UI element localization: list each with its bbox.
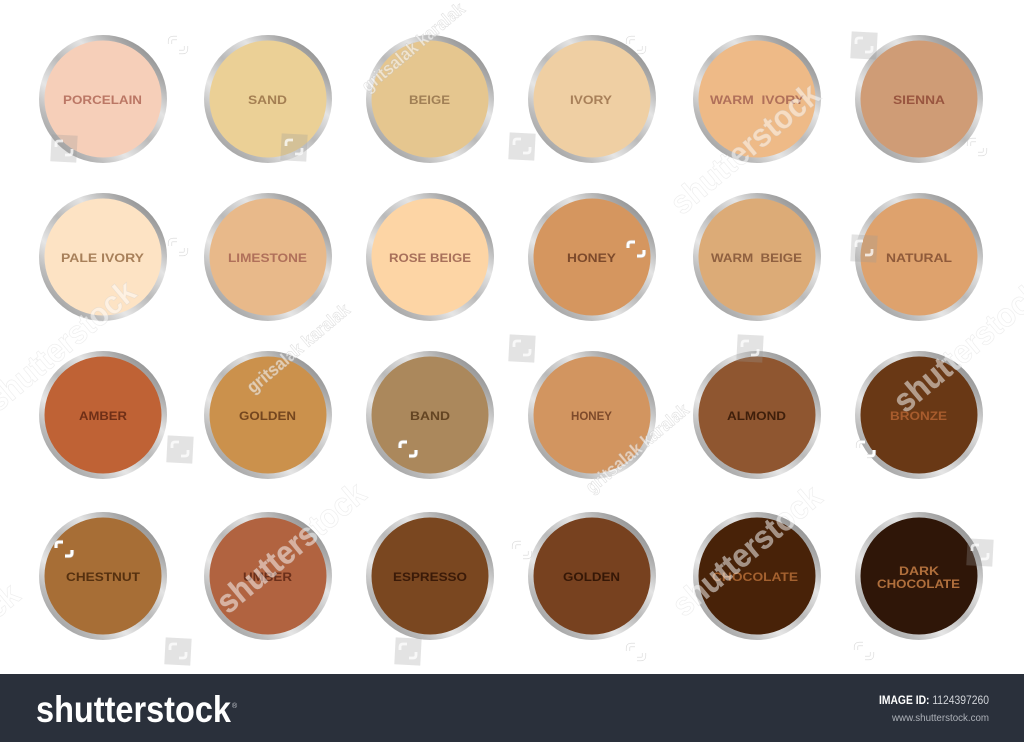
swatch: Porcelain: PORCELAIN bbox=[63, 95, 142, 107]
swatch: Ivory bbox=[528, 35, 656, 163]
swatch: Almond bbox=[693, 351, 821, 479]
swatch: Honey: HONEY bbox=[567, 253, 616, 265]
swatch: Porcelain bbox=[39, 35, 167, 163]
swatch: Limestone bbox=[204, 193, 332, 321]
swatch: Dark Chocolate: CHOCOLATE bbox=[877, 579, 960, 591]
swatch: Amber: AMBER bbox=[79, 411, 128, 423]
swatch: Golden dark bbox=[528, 512, 656, 640]
swatch: Honey: HONEY bbox=[571, 411, 612, 423]
swatch: Chestnut: CHESTNUT bbox=[66, 572, 140, 584]
swatch: Natural bbox=[855, 193, 983, 321]
swatch: Natural: NATURAL bbox=[886, 253, 952, 265]
swatch: Rose Beige bbox=[366, 193, 494, 321]
footer logo: shutterstock bbox=[36, 689, 231, 730]
swatch: Warm Ivory: WARM IVORY bbox=[710, 95, 804, 107]
swatch: Band: BAND bbox=[410, 411, 450, 423]
footer image id: IMAGE ID: 1124397260 bbox=[879, 695, 989, 707]
swatch: Beige: BEIGE bbox=[409, 95, 450, 107]
swatch: Chocolate: CHOCOLATE bbox=[712, 572, 798, 584]
swatch: Sienna: SIENNA bbox=[893, 95, 945, 107]
swatch: Espresso: ESPRESSO bbox=[393, 572, 467, 584]
swatch: Golden: GOLDEN bbox=[239, 411, 296, 423]
footer bar bbox=[0, 674, 1024, 742]
swatch: Ivory: IVORY bbox=[570, 95, 612, 107]
swatch: Espresso bbox=[366, 512, 494, 640]
swatch: Beige bbox=[366, 35, 494, 163]
swatch: Pale Ivory bbox=[39, 193, 167, 321]
swatch: Dark Chocolate bbox=[855, 512, 983, 640]
watermark: diagonal stock text: gritsalak karalak bbox=[582, 399, 693, 497]
watermark: diagonal stock text: gritsalak karalak bbox=[243, 299, 354, 397]
swatch: Sienna bbox=[855, 35, 983, 163]
swatch: Limestone: LIMESTONE bbox=[228, 253, 307, 265]
watermark: diagonal stock text: shutterstock bbox=[665, 477, 829, 623]
swatch: Band bbox=[366, 351, 494, 479]
swatch: Warm Ivory bbox=[693, 35, 821, 163]
watermark: diagonal stock text: shutterstock bbox=[209, 474, 373, 620]
swatch: Chocolate bbox=[693, 512, 821, 640]
footer logo: ® bbox=[232, 702, 238, 710]
watermark: square marks bbox=[50, 31, 994, 666]
swatch: Pale Ivory: PALE IVORY bbox=[61, 253, 144, 265]
swatch: Sand bbox=[204, 35, 332, 163]
footer url: www.shutterstock.com bbox=[891, 712, 989, 724]
watermark: diagonal stock text: shutterstock bbox=[663, 75, 827, 221]
swatch: Warm Beige: WARM BEIGE bbox=[711, 253, 802, 265]
swatch: Golden bbox=[204, 351, 332, 479]
swatch: Bronze: BRONZE bbox=[890, 411, 947, 423]
swatch: Amber bbox=[39, 351, 167, 479]
swatch: Dark Chocolate: DARK bbox=[899, 566, 940, 578]
swatch: Umber: UMBER bbox=[243, 572, 293, 584]
swatch: Bronze bbox=[855, 351, 983, 479]
swatch: Chestnut bbox=[39, 512, 167, 640]
swatch: Sand: SAND bbox=[248, 95, 287, 107]
swatch: Almond: ALMOND bbox=[727, 411, 786, 423]
swatch: Honey bbox=[528, 193, 656, 321]
swatch: Rose Beige: ROSE BEIGE bbox=[389, 253, 471, 265]
swatch: Honey bbox=[528, 351, 656, 479]
swatch: Golden dark: GOLDEN bbox=[563, 572, 620, 584]
swatch: Umber bbox=[204, 512, 332, 640]
swatch: Warm Beige bbox=[693, 193, 821, 321]
